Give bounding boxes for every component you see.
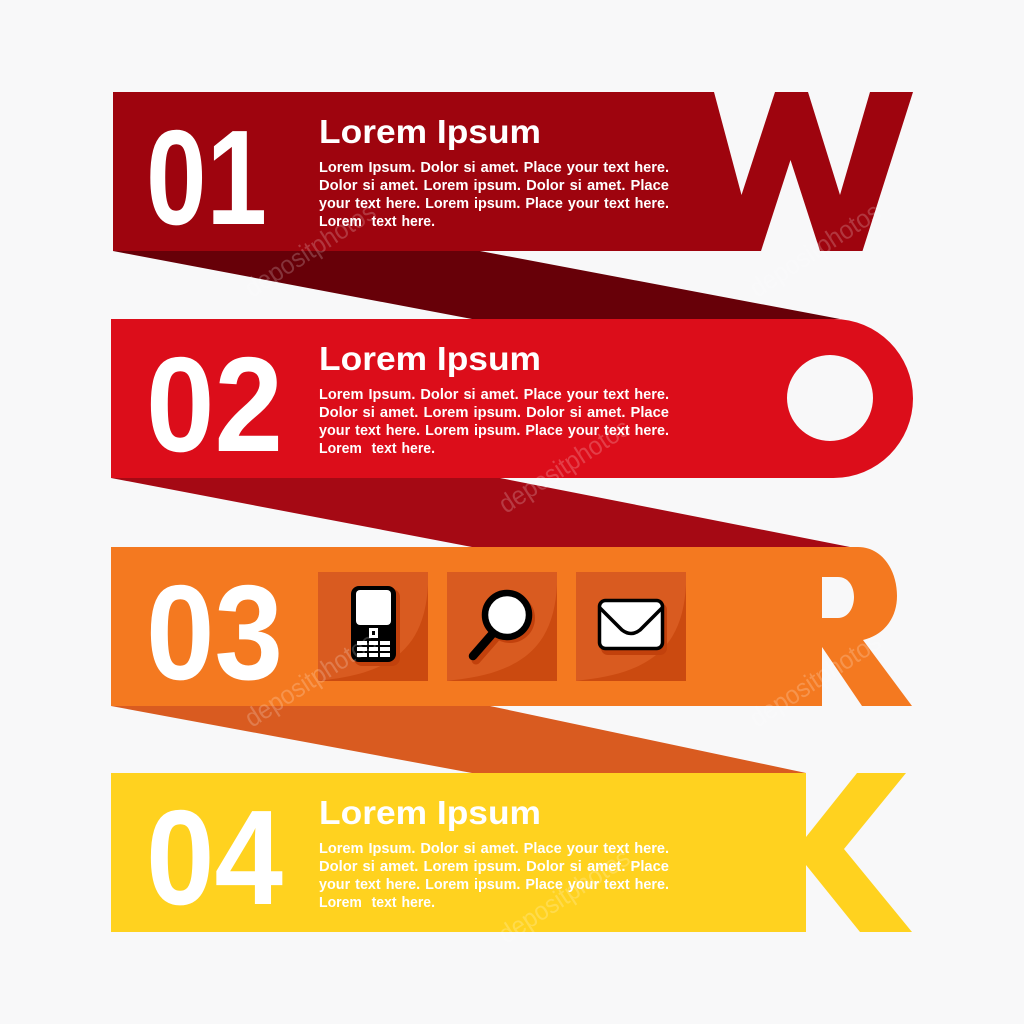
text block 04: your text here. Lorem ipsum. Place your text here. — [319, 877, 669, 893]
fold shadow between bands 1 and 2 — [113, 251, 840, 319]
number 02: 02 — [146, 329, 283, 480]
watermark: depositphotos — [493, 412, 635, 519]
band shape forming R — [111, 547, 912, 706]
text block 02: Lorem text here. — [319, 441, 435, 457]
text block 01: Lorem Ipsum. Dolor si amet. Place your text here. — [319, 160, 669, 176]
heading 02: Lorem Ipsum — [319, 340, 541, 377]
panel: band 04 with letter K — [111, 773, 912, 933]
heading 01: Lorem Ipsum — [319, 113, 541, 150]
watermark: depositphotos — [744, 626, 886, 733]
panel: band 03 with letter R and icons — [111, 547, 912, 708]
icon: envelope — [576, 572, 686, 681]
text block 04: Lorem text here. — [319, 895, 435, 911]
number 03: 03 — [146, 557, 283, 708]
number 01: 01 — [146, 102, 267, 253]
text block 04: Lorem Ipsum. Dolor si amet. Place your text here. — [319, 841, 669, 857]
fold shadow between bands 2 and 3 — [111, 478, 850, 547]
text block 04 — [319, 841, 669, 911]
number 04: 04 — [146, 782, 283, 933]
watermark: depositphotos — [493, 842, 635, 949]
text block 02 — [319, 387, 669, 457]
icon: magnifying glass — [447, 572, 557, 681]
text block 02: Lorem Ipsum. Dolor si amet. Place your text here. — [319, 387, 669, 403]
band shape forming K — [111, 773, 912, 932]
text block 02: Dolor si amet. Lorem ipsum. Dolor si amet. Place — [319, 405, 669, 421]
band shape forming O — [111, 319, 913, 478]
text block 01: Dolor si amet. Lorem ipsum. Dolor si amet. Place — [319, 178, 669, 194]
heading 04: Lorem Ipsum — [319, 794, 541, 831]
text block 01: Lorem text here. — [319, 214, 435, 230]
watermark — [239, 196, 886, 949]
panel: band 01 with letter W — [113, 92, 913, 253]
fold shadow between bands 3 and 4 — [111, 706, 806, 773]
watermark: depositphotos — [239, 626, 381, 733]
watermark: depositphotos — [239, 196, 381, 303]
text block 01: your text here. Lorem ipsum. Place your text here. — [319, 196, 669, 212]
watermark: depositphotos — [744, 196, 886, 303]
panel: band 02 with letter O — [111, 319, 913, 480]
band shape forming W — [113, 92, 913, 251]
text block 01 — [319, 160, 669, 230]
text block 02: your text here. Lorem ipsum. Place your text here. — [319, 423, 669, 439]
text block 04: Dolor si amet. Lorem ipsum. Dolor si amet. Place — [319, 859, 669, 875]
icon: mobile phone — [318, 572, 428, 681]
